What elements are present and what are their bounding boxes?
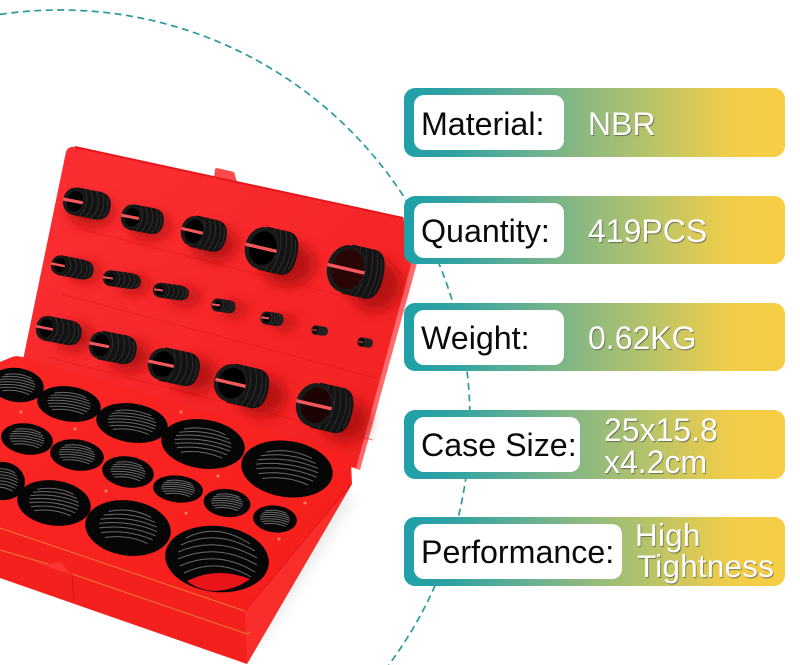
label text: Quantity: Quantity: [421,213,550,249]
label box: Quantity [414,203,564,258]
spec row: Weight [404,303,785,371]
base clip tab [24,557,72,575]
case lid [22,147,417,470]
value: 419PCS: 419PCS [588,213,707,249]
case base [0,356,352,664]
value: High Tightness: High [635,517,701,553]
spec row: Quantity [404,196,785,264]
spec row: Performance [404,517,785,586]
coils row 1 [61,185,389,302]
label text: Weight: Weight: [421,320,530,356]
label text: Case Size: Case Size: [421,427,577,463]
label box: Material [414,95,564,150]
label box: Case Size [414,417,580,472]
case seam lines [0,528,250,634]
dashed circle arc [0,10,470,665]
size markers [20,410,306,540]
label text: Performance: Performance: [421,534,614,570]
value: case dimensions [604,412,718,480]
coil shadows [57,198,401,442]
label text: Material: Material: [421,106,544,142]
value: High Tightness: Tightness [637,548,774,584]
coils row 3 [34,314,357,436]
case shadow [240,490,352,640]
value: High Tightness [635,517,774,585]
lid clip tab [214,168,237,182]
coils row 2 [49,254,374,348]
spec row: Case Size [404,410,785,479]
value: 0.62KG: 0.62KG [588,320,697,356]
value: case dimensions: 25x15.8 [604,412,718,448]
label box: Weight [414,310,564,365]
value: case dimensions: x4.2cm [604,444,707,480]
large ring hole with red bottom [162,521,272,597]
ring holes [0,364,336,597]
label box: Performance [414,524,622,579]
spec row: Material [404,88,785,157]
value: NBR: NBR [588,106,656,142]
